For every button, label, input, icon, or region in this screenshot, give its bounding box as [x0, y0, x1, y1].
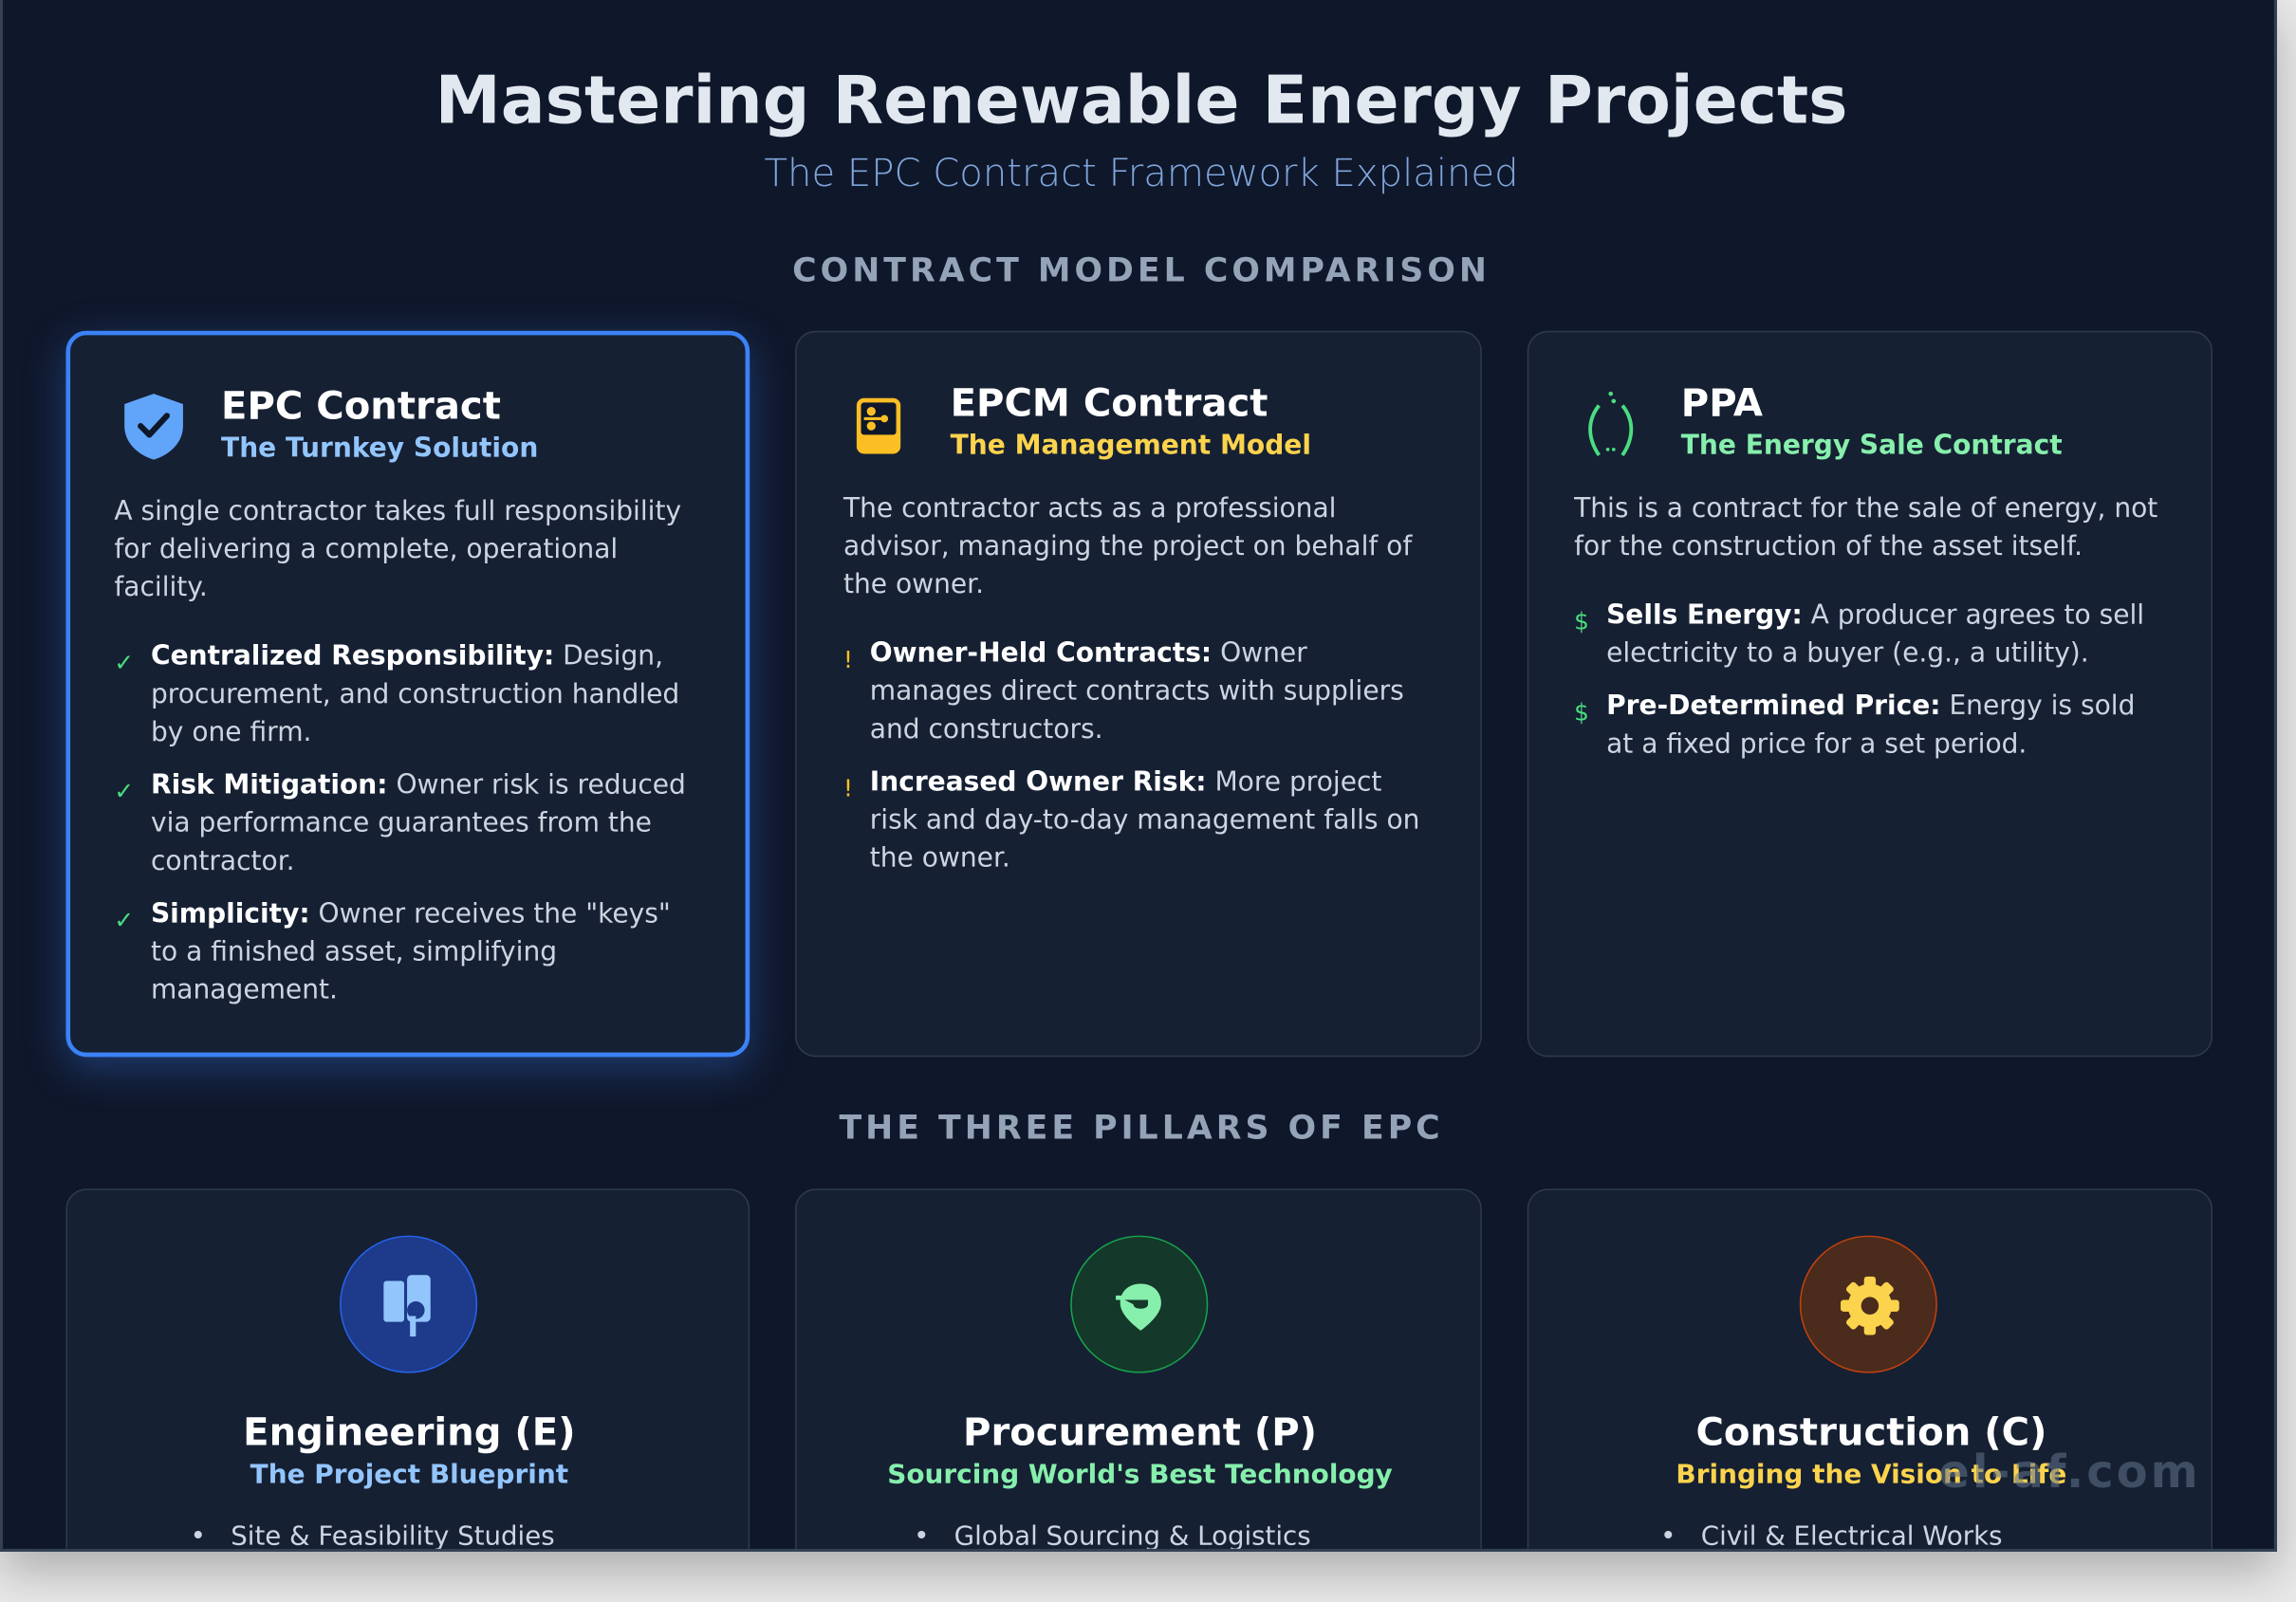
heading: Procurement: [887, 1411, 1393, 1490]
list: procurement: • Global Sourcing & Logistics: [914, 1521, 1311, 1552]
heading: EPCM Contract: [951, 382, 1311, 461]
text block: EPC description and list: Centralized Responsibility: Design, procurement, and construction handled by one firm.: [151, 641, 679, 748]
text block: EPCM description and list: !: [843, 774, 853, 802]
heading: EPC Contract: [221, 385, 538, 464]
section heading: three pillars: THE THREE PILLARS OF EPC: [839, 1110, 1444, 1148]
panel: Construction: [1528, 1188, 2213, 1602]
text block: EPC description and list: A single contractor takes full responsibility for delivering a complete, operational facility.: [114, 496, 681, 603]
icon: engineering: [340, 1236, 477, 1373]
text block: EPCM description and list: The contractor acts as a professional advisor, managing the project on behalf of the owner.: [843, 493, 1412, 600]
heading: Engineering: Engineering (E): [243, 1411, 576, 1455]
text block: EPC description and list: ✓: [114, 778, 134, 805]
text block: EPC description and list: ✓: [114, 906, 134, 934]
heading: EPC Contract: EPC Contract: [221, 385, 501, 429]
list: construction: • Civil & Electrical Works: [1660, 1521, 2003, 1552]
icon: procurement: [1070, 1236, 1208, 1373]
heading: Construction: Construction (C): [1695, 1411, 2046, 1455]
text block: PPA description and list: $: [1574, 698, 1589, 727]
text block: PPA description and list: Sells Energy: A producer agrees to sell electricity to a buyer (e.g., a utility).: [1606, 600, 2144, 669]
text block: PPA description and list: Pre-Determined Price: Energy is sold at a fixed price for a set period.: [1606, 691, 2135, 760]
heading: EPCM Contract: The Management Model: [951, 431, 1311, 461]
text block: EPCM description and list: Increased Owner Risk: More project risk and day-to-day management falls on the owner.: [870, 767, 1419, 874]
icon: energy brackets: [1588, 391, 1634, 456]
text block: PPA description and list: [1574, 493, 2157, 760]
heading: Engineering: [243, 1411, 576, 1490]
icon: gear: [1800, 1236, 1937, 1373]
title: Mastering Renewable Energy Projects: [435, 62, 1847, 139]
text block: EPCM description and list: !: [843, 646, 853, 673]
panel: EPC contract: [65, 331, 750, 1057]
heading: Procurement: Sourcing World's Best Technology: [887, 1460, 1393, 1490]
heading: PPA: [1681, 382, 2063, 461]
text block: EPCM description and list: Owner-Held Contracts: Owner manages direct contracts with suppliers and constructors.: [870, 638, 1404, 746]
text block: EPC description and list: [114, 496, 686, 1005]
panel: EPCM contract: [795, 331, 1482, 1057]
panel: PPA: [1528, 331, 2213, 1057]
icon: shield check: [124, 394, 183, 460]
heading: EPC Contract: The Turnkey Solution: [221, 433, 538, 464]
heading: PPA: PPA: [1681, 382, 1763, 426]
section heading: contract model comparison: CONTRACT MODEL COMPARISON: [792, 251, 1491, 290]
text block: EPC description and list: ✓: [114, 649, 134, 676]
text block: EPCM description and list: [842, 493, 1419, 874]
list: engineering: • Site & Feasibility Studies: [191, 1521, 555, 1552]
text block: PPA description and list: This is a contract for the sale of energy, not for the construction of the asset itself.: [1574, 493, 2157, 562]
panel: Procurement: [795, 1188, 1482, 1602]
text block: PPA description and list: $: [1574, 607, 1589, 635]
icon: management board: [856, 398, 901, 453]
text block: EPC description and list: Simplicity: Owner receives the "keys" to a finished asset, simplifying management.: [151, 899, 671, 1005]
heading: Construction: [1676, 1411, 2066, 1490]
heading: Construction: Bringing the Vision to Life: [1676, 1460, 2066, 1490]
panel: Engineering: [65, 1188, 750, 1602]
heading: PPA: The Energy Sale Contract: [1681, 431, 2063, 461]
heading: Procurement: Procurement (P): [963, 1411, 1317, 1455]
subtitle: The EPC Contract Framework Explained: [765, 153, 1519, 196]
text block: EPC description and list: Risk Mitigation: Owner risk is reduced via performance guarantees from the contractor.: [151, 770, 686, 876]
watermark: el-af.com: [1938, 1446, 2201, 1499]
heading: EPCM Contract: EPCM Contract: [951, 382, 1268, 426]
heading: Engineering: The Project Blueprint: [250, 1460, 568, 1490]
